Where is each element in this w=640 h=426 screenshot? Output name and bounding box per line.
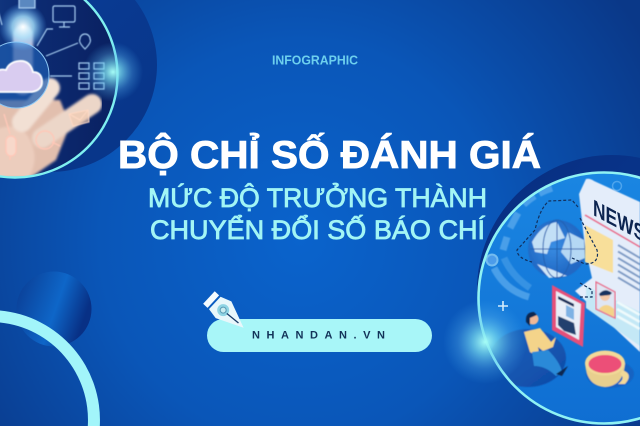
label: INFOGRAPHIC: INFOGRAPHIC — [272, 54, 358, 68]
glow right — [443, 300, 527, 384]
coffee cup — [585, 350, 634, 388]
hand — [0, 25, 92, 178]
ring — [0, 0, 118, 178]
cloud — [0, 61, 42, 92]
decorative halo right — [477, 155, 640, 425]
plus sign — [498, 301, 508, 311]
subheading line 1: MỨC ĐỘ TRƯỞNG THÀNH — [148, 181, 487, 213]
dashed route lines — [517, 200, 598, 297]
seated reader — [490, 312, 568, 387]
data arcs — [494, 188, 552, 297]
decorative ring bottom-left — [0, 310, 100, 426]
heading: BỘ CHỈ SỐ ĐÁNH GIÁ — [118, 132, 541, 177]
portrait card — [596, 282, 615, 318]
globe — [528, 220, 586, 278]
decorative gradient ball — [16, 272, 92, 346]
ring — [478, 172, 640, 424]
illustration: hand touching cloud — [0, 0, 120, 178]
website pill — [207, 319, 432, 352]
tablet — [552, 285, 585, 347]
glow top-left — [83, 42, 143, 102]
subheading line 2: CHUYỂN ĐỔI SỐ BÁO CHÍ — [150, 213, 485, 245]
website address: NHANDAN.VN — [252, 330, 385, 342]
decorative halo top-left — [0, 0, 157, 172]
envelope icon — [69, 110, 89, 126]
icon: fountain pen nib — [202, 288, 251, 337]
cloud lens — [0, 42, 49, 108]
illustration: digital newspaper — [475, 170, 640, 425]
microphone icon — [4, 114, 60, 160]
fingertip glow — [0, 5, 46, 49]
network lines and icons — [0, 0, 104, 89]
newspaper page — [575, 179, 640, 352]
